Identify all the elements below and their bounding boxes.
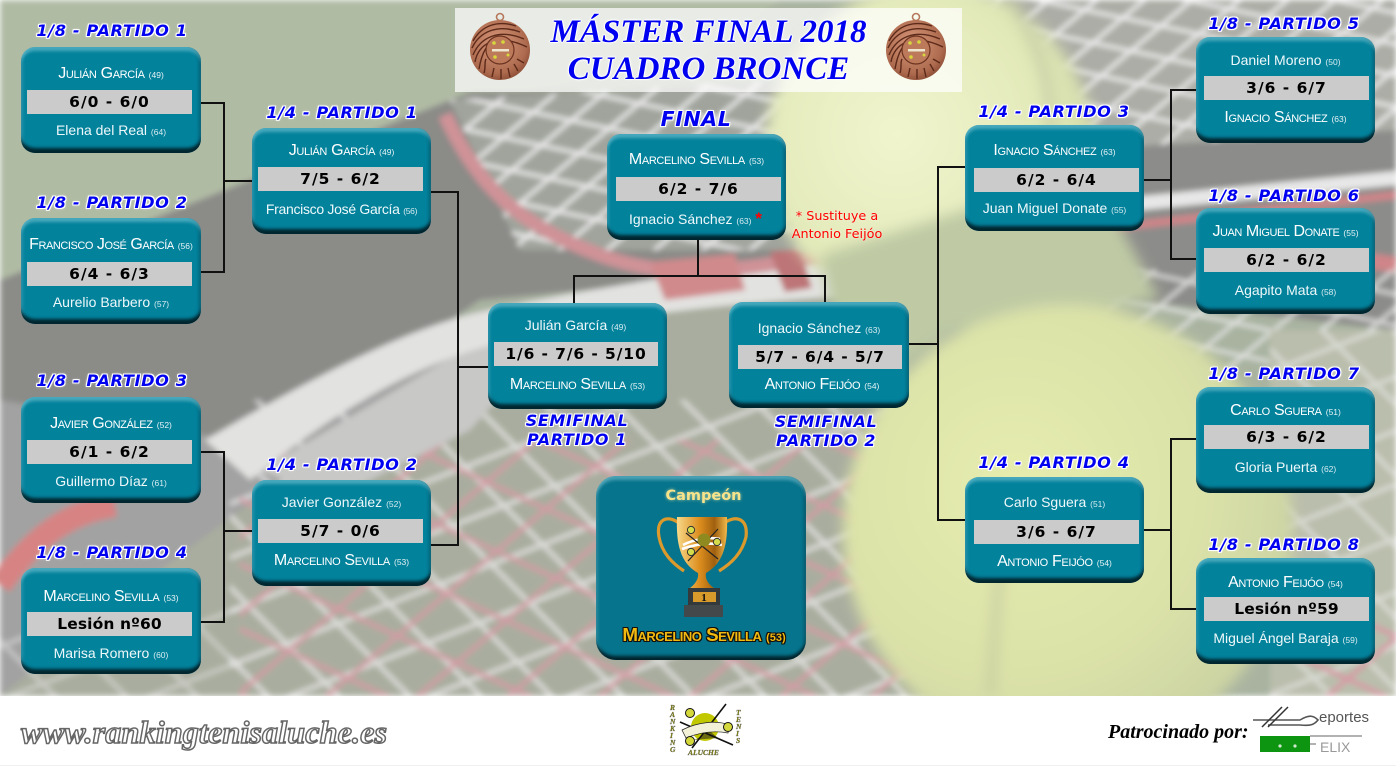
match card: 1/8 partido 6: Juan Miguel Donate (55) [1212,223,1359,240]
match card: semifinal 2 [729,302,909,408]
footer band [0,696,1396,766]
match card: final: 6/2 - 7/6 [658,180,739,198]
match card: 1/8 partido 8: Lesión nº59 [1234,600,1339,618]
match card: 1/8 partido 2: Aurelio Barbero (57) [53,294,169,310]
heading: semifinal partido 2: SEMIFINAL [775,412,877,431]
match card: 1/8 partido 8 [1196,558,1375,664]
match card: 1/8 partido 4: Lesión nº60 [57,615,162,633]
match card: 1/8 partido 6: Agapito Mata (58) [1235,282,1336,298]
match card: 1/8 partido 6 [1196,208,1375,314]
match card: 1/8 partido 2: Francisco José García (56) [29,236,193,253]
match card: 1/4 partido 2: Marcelino Sevilla (53) [274,552,409,569]
match card: 1/4 partido 3: Ignacio Sánchez (63) [993,142,1116,159]
match card: 1/8 partido 1: Elena del Real (64) [56,122,166,138]
match card: 1/4 partido 2 [252,480,431,586]
heading: 1/8 partido 3: 1/8 - PARTIDO 3 [36,371,188,390]
match card: 1/4 partido 4 [965,477,1144,583]
match card: 1/8 partido 7: Carlo Sguera (51) [1230,402,1341,419]
logo: deportes felix [1253,706,1369,755]
match card: 1/8 partido 3: Guillermo Díaz (61) [55,473,167,489]
match card: 1/8 partido 7: Gloria Puerta (62) [1235,459,1336,475]
icon: bronze medal left [470,12,530,80]
match card: semifinal 1: Marcelino Sevilla (53) [510,376,645,393]
heading: semifinal partido 1: PARTIDO 1 [527,430,627,449]
heading: semifinal partido 2: PARTIDO 2 [776,431,876,450]
logo: ranking tenis aluche: ALUCHE [687,748,719,757]
match card: 1/4 partido 3 [965,125,1144,231]
heading: semifinal partido 2 [774,412,877,450]
match card: 1/4 partido 2: Javier González (52) [282,494,401,510]
note: substitution: Antonio Feijóo [792,227,882,242]
heading: 1/8 partido 6: 1/8 - PARTIDO 6 [1208,186,1360,205]
icon: gold trophy [656,517,748,617]
title text: MÁSTER FINAL 2018 [550,14,866,50]
match card: 1/8 partido 5: 3/6 - 6/7 [1246,79,1327,97]
match card: 1/8 partido 5: Daniel Moreno (50) [1230,52,1341,68]
heading: semifinal partido 1 [524,411,628,449]
match card: 1/8 partido 6: 6/2 - 6/2 [1246,251,1327,269]
match card: 1/8 partido 1: Julián García (49) [58,65,164,82]
match card: semifinal 2: Ignacio Sánchez (63) [758,320,880,336]
title banner [455,8,962,92]
logo: deportes felix: ELIX [1320,739,1351,755]
match card: semifinal 1: Julián García (49) [525,317,626,333]
match card: 1/4 partido 4: 3/6 - 6/7 [1016,523,1097,541]
title text: CUADRO BRONCE [568,50,849,86]
match card: 1/4 partido 3: 6/2 - 6/4 [1016,171,1097,189]
heading: 1/8 partido 2: 1/8 - PARTIDO 2 [36,193,188,212]
note: substitution [792,209,882,242]
match card: 1/8 partido 3: 6/1 - 6/2 [69,443,150,461]
match card: 1/4 partido 1 [252,128,431,234]
match card: 1/4 partido 1: Julián García (49) [289,142,394,159]
match card: 1/8 partido 5: Ignacio Sánchez (63) [1224,109,1347,126]
match card: 1/8 partido 1 [21,47,201,153]
match card: 1/8 partido 8: Antonio Feijóo (54) [1228,574,1343,591]
match card: final [607,134,786,240]
note: substitution: * Sustituye a [796,209,878,224]
icon: bronze medal right [886,12,946,80]
match card: 1/8 partido 4 [21,568,201,674]
heading: semifinal partido 1: SEMIFINAL [526,411,628,430]
heading: 1/4 partido 4: 1/4 - PARTIDO 4 [978,453,1130,472]
champion name: Marcelino Sevilla (53) [622,624,786,645]
title text [549,12,867,86]
match card: 1/8 partido 7: 6/3 - 6/2 [1246,428,1327,446]
logo: deportes felix: eportes [1319,709,1369,726]
champion label: Campeón [665,488,742,504]
match card: final: Marcelino Sevilla (53) [629,151,764,168]
heading: 1/8 partido 5: 1/8 - PARTIDO 5 [1208,14,1360,33]
match card: 1/4 partido 3: Juan Miguel Donate (55) [983,200,1126,216]
match card: 1/8 partido 2: 6/4 - 6/3 [69,265,150,283]
match card: 1/8 partido 3 [21,397,201,503]
logo: ranking tenis aluche: TENIS [735,708,742,745]
match card: 1/8 partido 3: Javier González (52) [50,415,172,432]
heading: 1/8 partido 1: 1/8 - PARTIDO 1 [36,21,188,40]
logo: ranking tenis aluche [669,703,742,757]
heading: 1/8 partido 7: 1/8 - PARTIDO 7 [1208,364,1360,383]
champion panel [596,476,806,660]
match card: 1/4 partido 1: Francisco José García (56) [266,201,417,217]
match card: 1/8 partido 2 [21,218,201,324]
heading: 1/4 partido 2: 1/4 - PARTIDO 2 [266,455,418,474]
match card: semifinal 1: 1/6 - 7/6 - 5/10 [505,345,647,363]
match card: final: Ignacio Sánchez (63) * [629,209,762,228]
heading: 1/4 partido 1: 1/4 - PARTIDO 1 [266,103,418,122]
match card: 1/4 partido 4: Antonio Feijóo (54) [997,553,1112,570]
icon: gold trophy: 1 [701,592,707,604]
sponsor label: Patrocinado por: [1108,721,1249,743]
heading: 1/8 partido 4: 1/8 - PARTIDO 4 [36,543,188,562]
match card: 1/8 partido 4: Marisa Romero (60) [54,645,168,661]
heading: 1/4 partido 3: 1/4 - PARTIDO 3 [978,102,1130,121]
match card: semifinal 2: Antonio Feijóo (54) [765,376,879,393]
match card: 1/4 partido 4: Carlo Sguera (51) [1004,494,1105,510]
heading: 1/8 partido 8: 1/8 - PARTIDO 8 [1208,535,1360,554]
website url: www.rankingtenisaluche.es [21,714,387,750]
match card: semifinal 2: 5/7 - 6/4 - 5/7 [755,348,885,366]
match card: 1/8 partido 4: Marcelino Sevilla (53) [43,588,179,605]
logo: ranking tenis aluche: RANKING [669,703,676,754]
match card: 1/4 partido 1: 7/5 - 6/2 [300,170,381,188]
match card: 1/8 partido 7 [1196,387,1375,493]
match card: semifinal 1 [488,303,667,409]
match card: 1/8 partido 1: 6/0 - 6/0 [69,93,150,111]
heading: final: FINAL [661,107,731,131]
match card: 1/4 partido 2: 5/7 - 0/6 [300,522,381,540]
match card: 1/8 partido 8: Miguel Ángel Baraja (59) [1213,630,1358,646]
match card: 1/8 partido 5 [1196,37,1375,143]
